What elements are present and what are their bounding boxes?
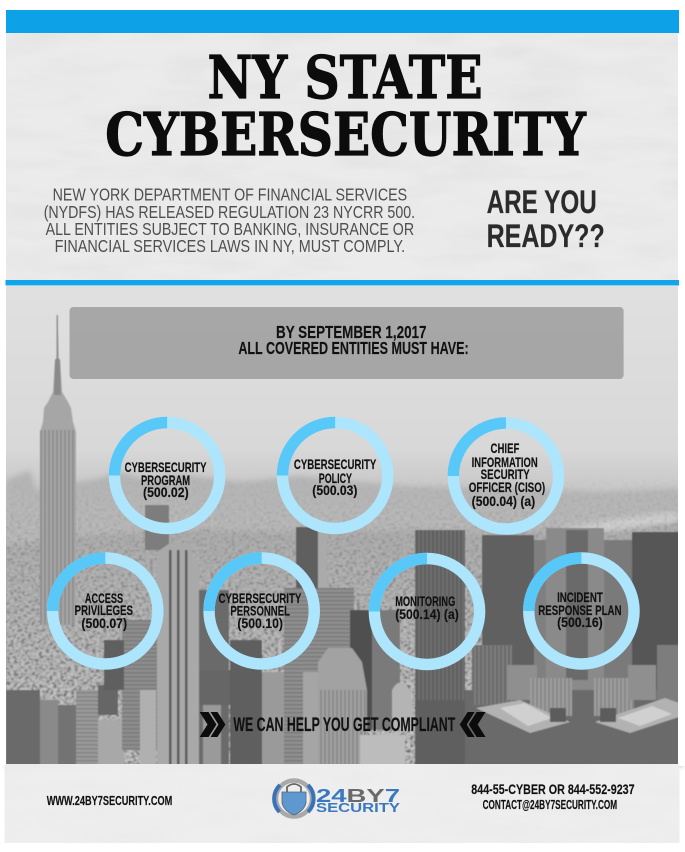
intro paragraph: FINANCIAL SERVICES LAWS IN NY, MUST COMPLY. <box>55 236 405 256</box>
circle: incident response plan: (500.16) <box>557 615 603 630</box>
circle: CISO: (500.04) (a) <box>472 494 535 509</box>
circle: incident response plan: INCIDENT <box>557 590 603 605</box>
circle: incident response plan: RESPONSE PLAN <box>538 603 622 618</box>
circle: cybersecurity program <box>114 422 220 528</box>
call to action: WE CAN HELP YOU GET COMPLIANT <box>233 715 456 736</box>
circle: monitoring: MONITORING <box>395 594 455 609</box>
centre towers <box>230 640 262 765</box>
circle: CISO: OFFICER (CISO) <box>469 480 545 495</box>
circle: cybersecurity personnel: (500.10) <box>237 616 283 631</box>
circle: CISO: SECURITY <box>481 467 530 482</box>
empire state building <box>40 315 76 625</box>
title: NY STATE <box>208 43 483 112</box>
circle: cybersecurity personnel <box>209 558 314 664</box>
striped skyscraper <box>157 543 199 765</box>
intro paragraph: ALL ENTITIES SUBJECT TO BANKING, INSURANCE OR <box>46 219 414 239</box>
logo: 24by7 security <box>274 780 401 816</box>
intro paragraph: NEW YORK DEPARTMENT OF FINANCIAL SERVICES <box>53 184 407 205</box>
intro paragraph: (NYDFS) HAS RELEASED REGULATION 23 NYCRR 500. <box>44 202 415 222</box>
city texture <box>6 480 678 765</box>
circle: monitoring: (500.14) (a) <box>395 607 459 622</box>
title <box>105 43 587 169</box>
footer panel: CONTACT@24BY7SECURITY.COM <box>483 798 617 812</box>
deadline banner: BY SEPTEMBER 1,2017 <box>276 322 427 342</box>
circle: cybersecurity policy: POLICY <box>319 471 352 486</box>
skyline background panel <box>0 286 685 766</box>
title: CYBERSECURITY <box>105 100 587 169</box>
deadline banner <box>70 307 624 379</box>
second blue bar <box>6 280 679 286</box>
footer panel: WWW.24BY7SECURITY.COM <box>47 794 172 808</box>
circle: access privileges: ACCESS <box>85 591 123 606</box>
circle: access privileges <box>53 558 158 664</box>
midtown towers <box>145 505 169 550</box>
circle: cybersecurity program: (500.02) <box>143 485 189 500</box>
circle: CISO: INFORMATION <box>472 455 538 470</box>
circle: monitoring <box>374 558 480 664</box>
circle: CISO: CHIEF <box>491 441 519 456</box>
footer panel <box>4 764 680 843</box>
circle: cybersecurity policy: CYBERSECURITY <box>294 457 376 472</box>
call to action <box>200 712 486 737</box>
circle: CISO <box>453 423 559 529</box>
top blue bar <box>6 10 679 33</box>
are you ready heading <box>487 184 605 254</box>
intro paragraph <box>44 184 415 256</box>
far skyline <box>6 470 682 765</box>
top header panel <box>6 10 679 282</box>
logo: 24by7 security: SECURITY <box>316 801 401 815</box>
circle: access privileges: PRIVILEGES <box>74 603 133 618</box>
circle: incident response plan <box>529 558 634 664</box>
circle: cybersecurity program: CYBERSECURITY <box>125 460 207 475</box>
circle: cybersecurity policy: (500.03) <box>312 483 357 498</box>
are you ready heading: ARE YOU <box>487 184 597 220</box>
logo: 24by7 security: 24 BY 7 <box>316 786 400 806</box>
are you ready heading: READY?? <box>487 218 605 254</box>
circle: cybersecurity personnel: CYBERSECURITY <box>218 591 301 606</box>
lower right district <box>465 645 682 765</box>
circle: access privileges: (500.07) <box>81 616 127 631</box>
circle: cybersecurity personnel: PERSONNEL <box>230 603 290 619</box>
icon: right chevrons <box>200 712 225 737</box>
footer panel: 844-55-CYBER OR 844-552-9237 <box>471 782 635 797</box>
circle: cybersecurity policy <box>283 422 388 528</box>
icon: shield ring <box>274 780 314 816</box>
lower left blocks <box>6 690 40 765</box>
circle: cybersecurity program: PROGRAM <box>141 473 190 488</box>
deadline banner: ALL COVERED ENTITIES MUST HAVE: <box>238 338 469 358</box>
